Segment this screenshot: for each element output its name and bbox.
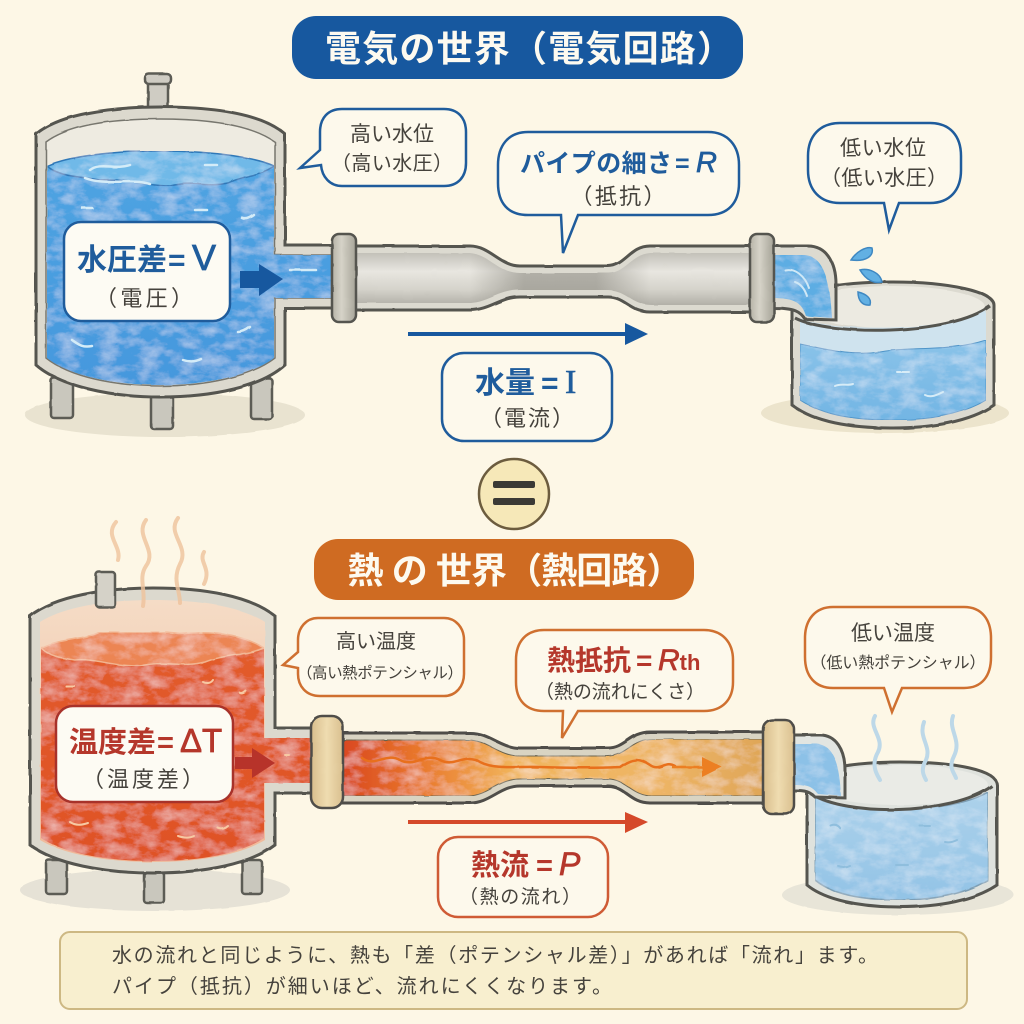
summary note: 水の流れと同じように、熱も「差（ポテンシャル差）」があれば「流れ」ます。 (112, 944, 878, 967)
title: heat world: 熱 の 世界（熱回路） (348, 550, 682, 591)
flow arrow: current (408, 323, 648, 345)
water highlights (72, 165, 316, 361)
heat flow label: P (438, 837, 608, 917)
bubble: pipe thinness = R: = (675, 150, 690, 178)
bubble: pipe thinness = R: （抵抗） (570, 184, 666, 209)
arrow: into heat pipe (235, 748, 275, 778)
bubble: high temperature: 高い温度 (336, 630, 416, 653)
right flange (750, 234, 774, 322)
bubble: low water: 低い水位 (840, 137, 926, 160)
pressure label: V: 水圧差 (77, 244, 167, 277)
pipe: thermal resistance (311, 716, 794, 814)
flow arrow: heat flow (408, 812, 648, 833)
bubble: pipe thinness = R (498, 132, 739, 253)
pressure label: V: = (168, 244, 186, 277)
bubble: thermal resistance: th (680, 650, 700, 675)
low water pot (761, 282, 1009, 433)
bubble: low temperature (805, 607, 991, 712)
bubble: low temperature: 低い温度 (851, 622, 935, 645)
title: electric world (292, 16, 743, 79)
steam: hot tank (112, 518, 207, 606)
current label: I: = (541, 367, 559, 400)
bubble: thermal resistance (516, 630, 733, 738)
bubble: high temperature (283, 618, 464, 696)
cold water pot (782, 762, 1014, 915)
current label: I (442, 353, 612, 441)
summary note (60, 932, 967, 1009)
current label: I: 水量 (475, 367, 535, 400)
pipe: electric (332, 234, 774, 322)
bubble: high water: 高い水位 (350, 123, 434, 146)
heat flow label: P: 熱流 (471, 849, 529, 882)
current label: I: （電流） (480, 406, 574, 431)
heat flow label: P: （熱の流れ） (459, 886, 581, 908)
pressure label: V: V (192, 237, 216, 278)
hot liquid (41, 633, 320, 861)
bubble: high water (300, 109, 466, 186)
heat flow label: P: = (536, 850, 553, 882)
current label: I: I (565, 364, 576, 401)
temperature label: delta T (56, 706, 233, 802)
temperature label: delta T: = (157, 727, 174, 759)
pressure label: V (64, 222, 230, 321)
tank legs (46, 860, 262, 903)
bubble: high temperature: （高い熱ポテンシャル） (297, 664, 463, 682)
heat tank: high temperature (20, 572, 320, 911)
heat flow label: P: P (559, 846, 581, 882)
right flange (763, 720, 794, 814)
water drops (851, 248, 882, 305)
bubble: low water: （低い水圧） (820, 167, 948, 190)
bubble: thermal resistance: R (658, 644, 680, 677)
vent (96, 572, 115, 607)
tank legs (51, 378, 272, 429)
title: heat world (314, 539, 694, 600)
arrow: into pipe (240, 264, 283, 296)
pipe elbow: cold water (792, 735, 845, 798)
vent (145, 74, 171, 124)
summary note: パイプ（抵抗）が細いほど、流れにくくなります。 (112, 975, 612, 998)
temperature label: delta T: （温度差） (82, 767, 204, 792)
left flange (332, 234, 356, 322)
bubble: pipe thinness = R: パイプの細さ (520, 150, 672, 178)
title: electric world: 電気の世界（電気回路） (325, 28, 733, 69)
temperature label: delta T: 温度差 (69, 726, 156, 759)
bubble: low temperature: （低い熱ポテンシャル） (810, 654, 986, 672)
left flange (311, 716, 343, 808)
pressure label: V: （電圧） (95, 286, 193, 311)
bubble: thermal resistance: = (636, 645, 652, 676)
temperature label: delta T: ΔT (180, 722, 222, 759)
equals sign (479, 459, 549, 529)
bubble: thermal resistance: 熱抵抗 (547, 645, 631, 676)
heat wave arrow (362, 758, 675, 768)
bubble: thermal resistance: （熱の流れにくさ） (535, 681, 705, 703)
pipe elbow: water outflow (772, 246, 836, 320)
bubble: pipe thinness = R: R (696, 147, 717, 179)
water tank: high level (25, 74, 340, 437)
water body (47, 152, 340, 385)
steam: cold pot (873, 716, 957, 780)
bubble: high water: （高い水圧） (331, 152, 453, 175)
bubble: low water (808, 123, 961, 230)
